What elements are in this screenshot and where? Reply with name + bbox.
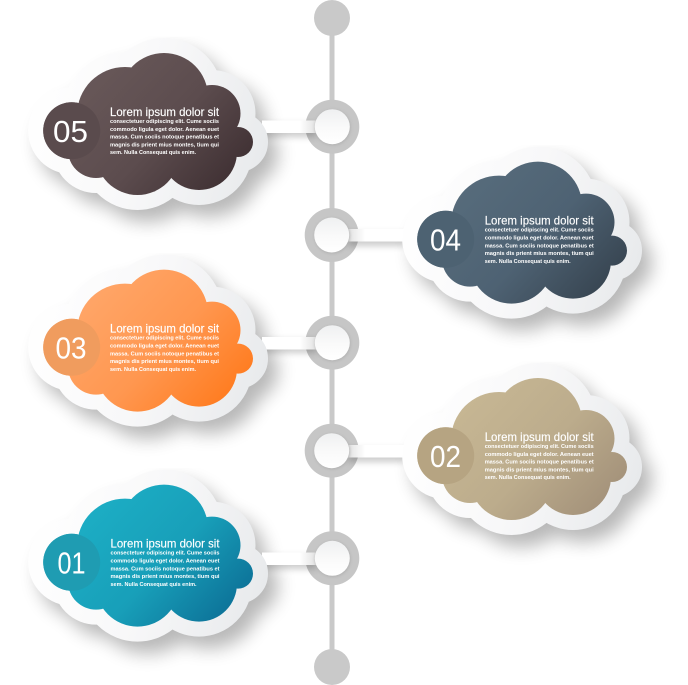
panel: cloud 02 bbox=[417, 378, 627, 520]
text block 04: Lorem ipsum dolor sit bbox=[485, 214, 594, 228]
top end circle bbox=[314, 0, 350, 36]
text block 04: magnis dis prient mius montes, tium qui bbox=[485, 251, 594, 257]
timeline vertical line bbox=[330, 18, 334, 668]
text block 02: Lorem ipsum dolor sit bbox=[485, 430, 594, 444]
text block 05: massa. Cum sociis notoque penatibus et bbox=[110, 135, 219, 141]
timeline node 03 bbox=[262, 316, 359, 370]
text block 02: commodo ligula eget dolor. Aenean euet bbox=[485, 452, 594, 458]
number badge 02 bbox=[417, 427, 474, 484]
text block 01: consectetuer odipiscing elit. Cume sociis bbox=[110, 551, 220, 557]
text block 03: massa. Cum sociis notoque penatibus et bbox=[110, 351, 219, 357]
text block 02: magnis dis prient mius montes, tium qui bbox=[485, 467, 594, 473]
number badge 01 bbox=[43, 534, 100, 591]
bottom end circle bbox=[314, 649, 350, 685]
number badge 04 bbox=[417, 211, 474, 268]
text block 03: magnis dis prient mius montes, tium qui bbox=[110, 359, 219, 365]
text block 05: sem. Nulla Consequat quis enim. bbox=[110, 150, 196, 156]
cloud drop shadows bbox=[53, 65, 637, 639]
panel: cloud 05 bbox=[43, 53, 253, 195]
timeline node 02 bbox=[305, 424, 406, 478]
text block 04: sem. Nulla Consequat quis enim. bbox=[485, 259, 571, 265]
text block 05: Lorem ipsum dolor sit bbox=[110, 105, 220, 119]
text block 01: magnis dis prient mius montes, tium qui bbox=[110, 574, 220, 580]
text block 01: massa. Cum sociis notoque penatibus et bbox=[110, 566, 220, 572]
text block 02: massa. Cum sociis notoque penatibus et bbox=[485, 460, 594, 466]
number badge 03: 03 bbox=[56, 331, 86, 366]
text block 03 bbox=[110, 322, 220, 373]
text block 01: commodo ligula eget dolor. Aenean euet bbox=[110, 559, 220, 565]
text block 04: commodo ligula eget dolor. Aenean euet bbox=[485, 236, 594, 242]
text block 02: consectetuer odipiscing elit. Cume sociis bbox=[485, 444, 594, 450]
text block 01: sem. Nulla Consequat quis enim. bbox=[110, 582, 197, 588]
text block 02: sem. Nulla Consequat quis enim. bbox=[485, 475, 571, 481]
timeline node 05 bbox=[262, 100, 359, 154]
text block 03: commodo ligula eget dolor. Aenean euet bbox=[110, 344, 219, 350]
number badge 02: 02 bbox=[430, 439, 461, 474]
text block 05: magnis dis prient mius montes, tium qui bbox=[110, 142, 219, 148]
text block 03: Lorem ipsum dolor sit bbox=[110, 322, 220, 336]
timeline node 01 bbox=[262, 531, 359, 585]
text block 05: consectetuer odipiscing elit. Cume sociis bbox=[110, 119, 219, 125]
number badge 05 bbox=[43, 102, 100, 159]
text block 04: massa. Cum sociis notoque penatibus et bbox=[485, 243, 594, 249]
text block 01: Lorem ipsum dolor sit bbox=[110, 537, 220, 551]
number badge 04: 04 bbox=[430, 223, 461, 258]
text block 01 bbox=[110, 537, 220, 588]
number badge 03 bbox=[43, 319, 100, 376]
panel: cloud 04 bbox=[417, 162, 627, 304]
text block 04: consectetuer odipiscing elit. Cume sociis bbox=[485, 228, 594, 234]
timeline node 04 bbox=[305, 208, 406, 262]
number badge 05: 05 bbox=[53, 114, 88, 149]
panel: cloud 03 bbox=[43, 270, 253, 412]
text block 03: consectetuer odipiscing elit. Cume sociis bbox=[110, 336, 219, 342]
number badge 01: 01 bbox=[58, 546, 86, 581]
text block 05: commodo ligula eget dolor. Aenean euet bbox=[110, 127, 219, 133]
text block 05 bbox=[110, 105, 220, 156]
panel: cloud 01 bbox=[43, 485, 253, 627]
text block 03: sem. Nulla Consequat quis enim. bbox=[110, 367, 196, 373]
text block 02 bbox=[485, 430, 594, 481]
text block 04 bbox=[485, 214, 594, 265]
